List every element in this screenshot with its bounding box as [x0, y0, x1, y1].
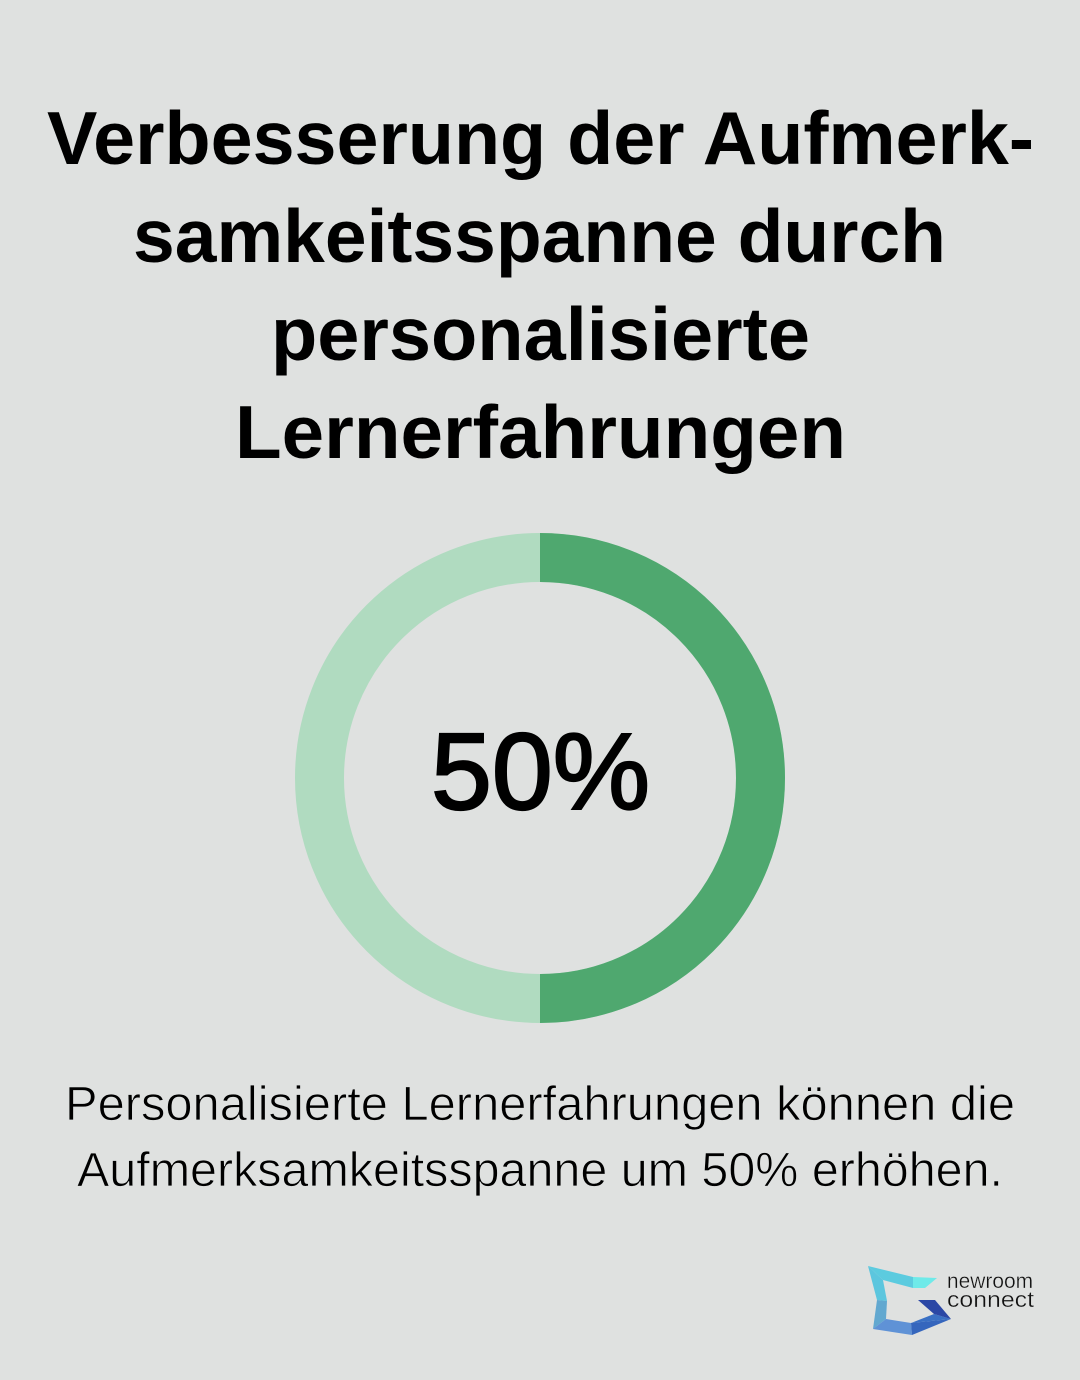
title: samkeitsspanne durch — [133, 194, 946, 278]
description text: Aufmerksamkeitsspanne um 50% erhöhen. — [77, 1144, 1003, 1197]
logo wordmark: connect — [947, 1287, 1034, 1312]
logo wordmark — [947, 1270, 1034, 1312]
logo wordmark: newroom — [947, 1270, 1033, 1293]
title: Lernerfahrungen — [235, 390, 846, 474]
donut chart: 50% — [320, 558, 760, 998]
logo: newroom connect — [868, 1266, 1034, 1335]
title: personalisierte — [271, 292, 810, 376]
chart value: 50% — [431, 711, 650, 833]
description text: Personalisierte Lernerfahrungen können die — [65, 1078, 1015, 1131]
logo mark — [868, 1266, 951, 1335]
description text — [65, 1078, 1015, 1197]
title: Verbesserung der Aufmerk- — [47, 96, 1034, 180]
title — [47, 96, 1034, 474]
